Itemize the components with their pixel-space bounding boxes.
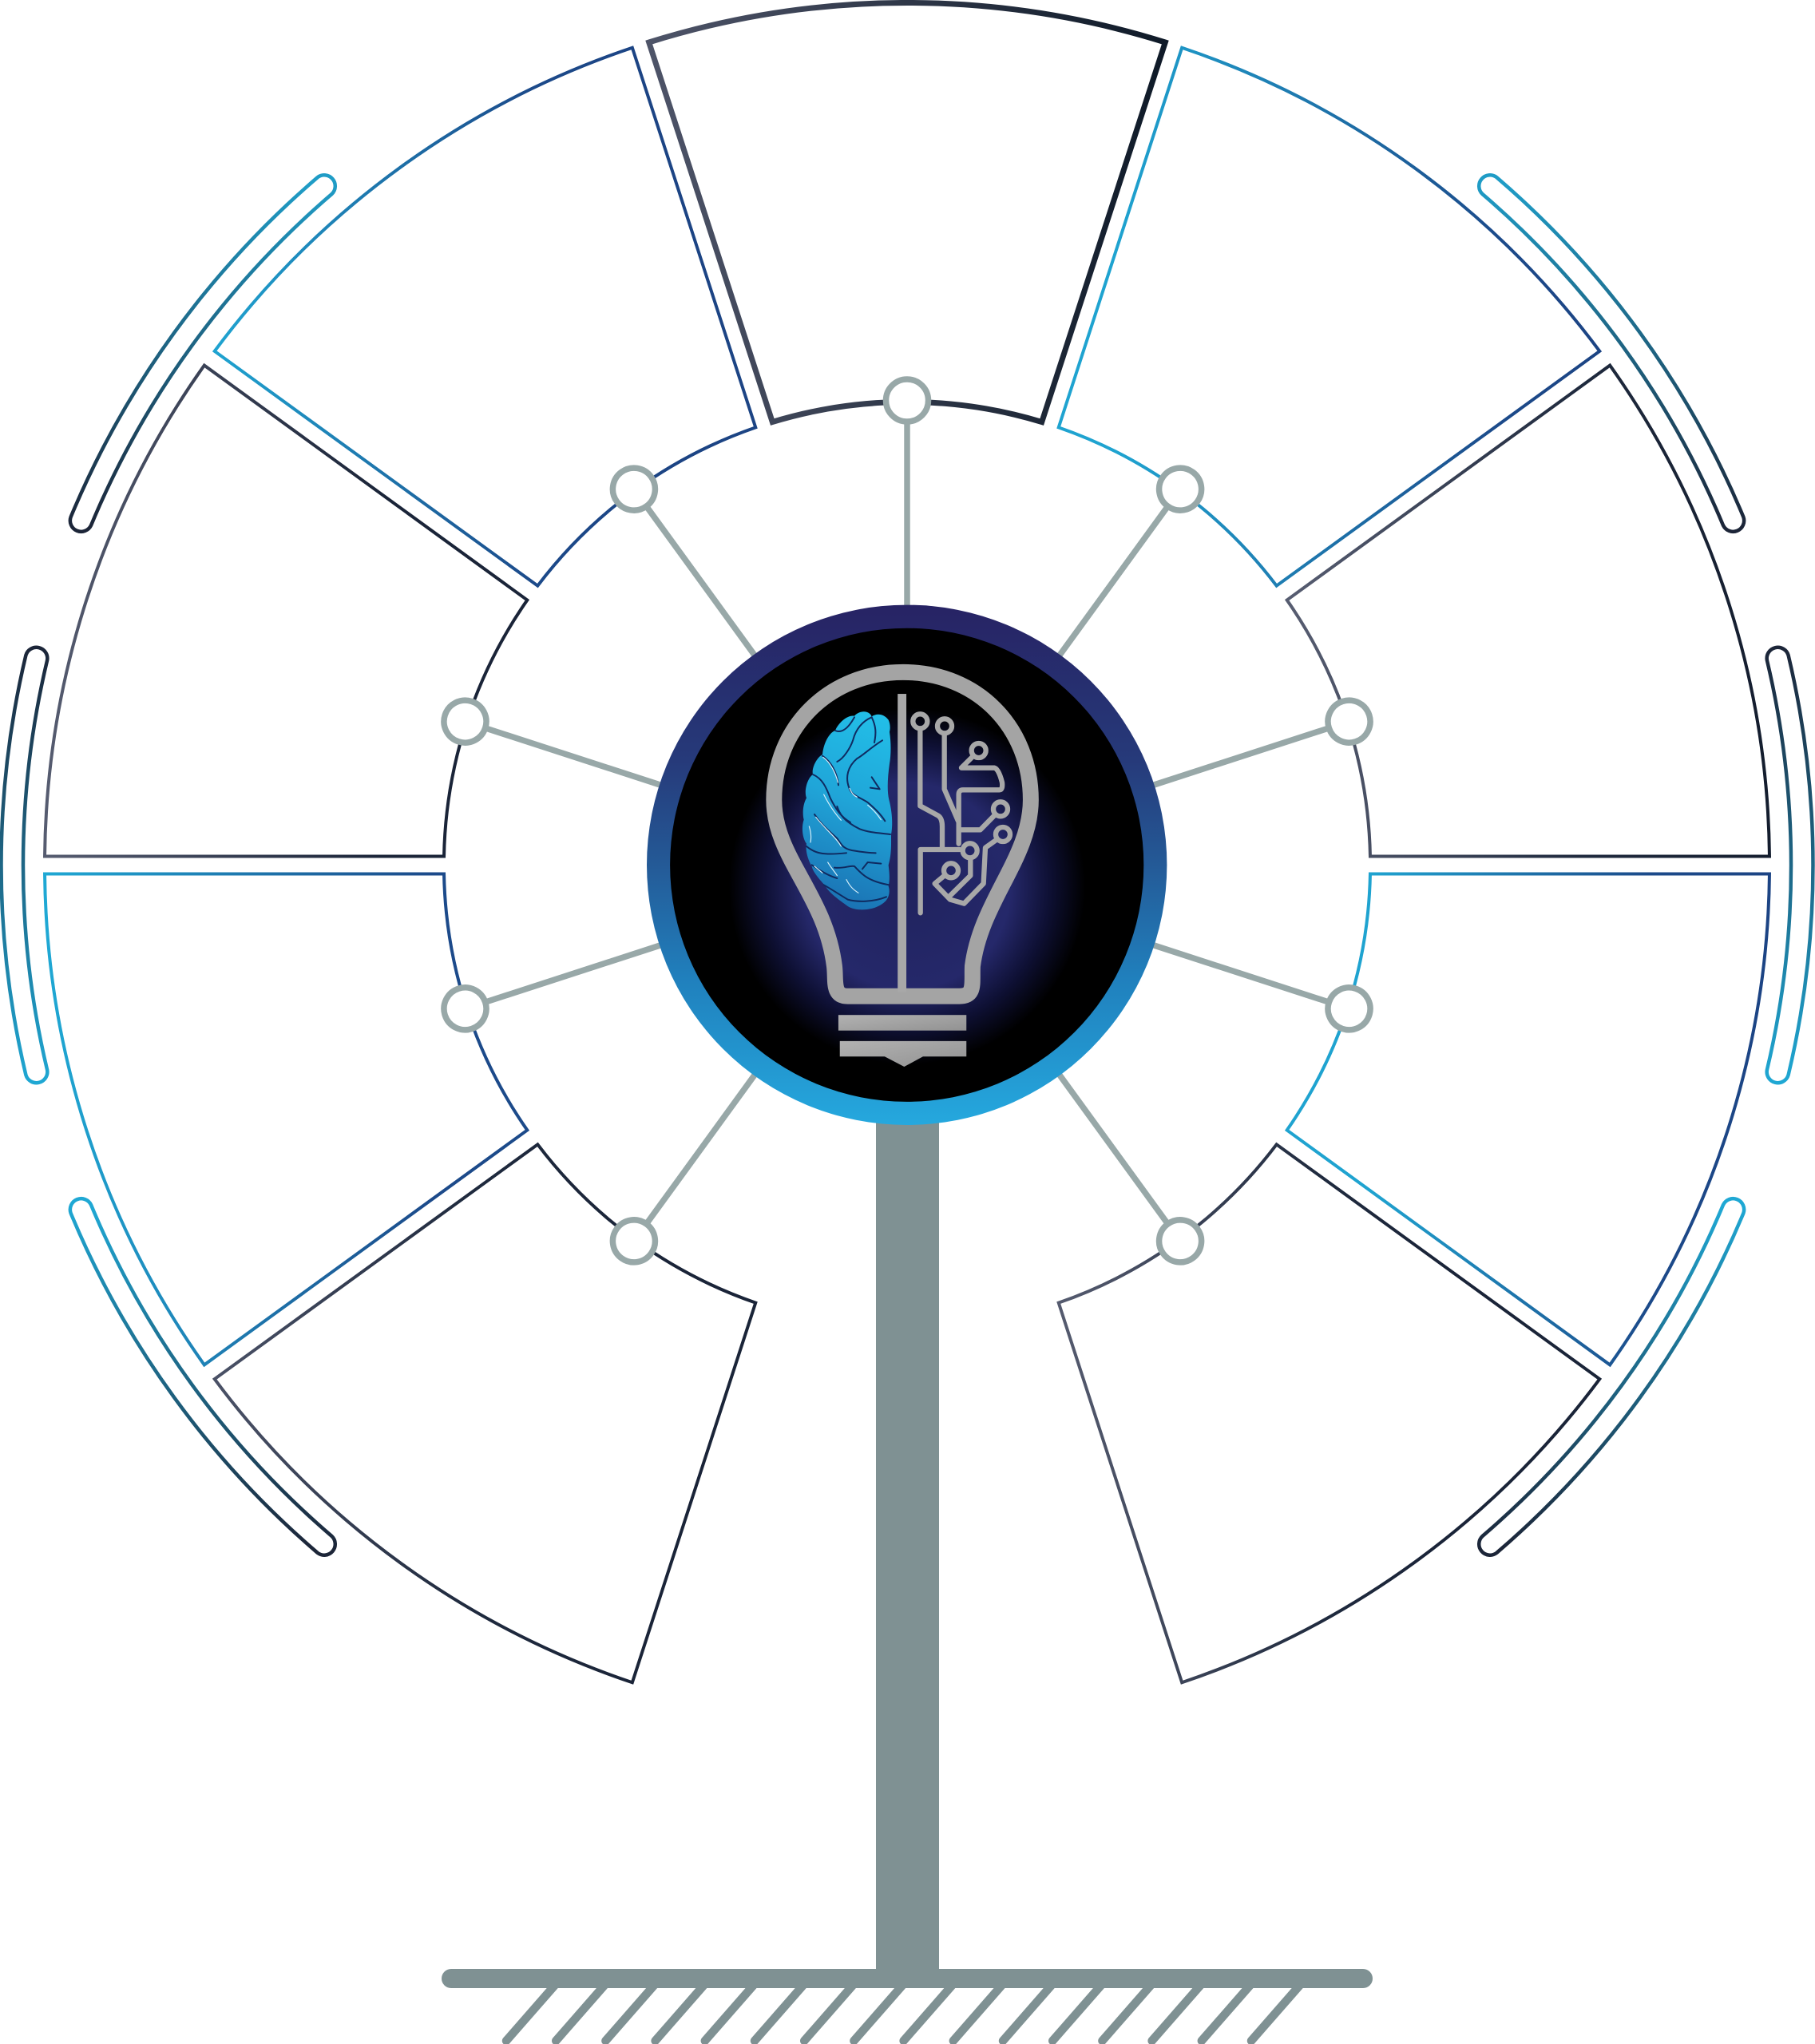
capsule: upper left: [46, 156, 339, 536]
panel: segment upper left: [192, 16, 855, 659]
icon: lightbulb outline and base: [774, 672, 1031, 1067]
badge dark disc: [670, 628, 1143, 1102]
spoke node -144: [604, 1056, 777, 1270]
spoke node -36: [604, 460, 777, 675]
badge inner glow: [719, 699, 1095, 1074]
base bar: [442, 1969, 1373, 1988]
capsule: upper right: [1475, 156, 1768, 536]
panel: segment right lower: [1249, 757, 1807, 1377]
capsule: lower left: [46, 1194, 339, 1574]
brain highlights: [809, 757, 881, 893]
icon: circuit traces: [913, 714, 1010, 913]
panel: segment right upper: [1249, 353, 1807, 973]
spoke node 36: [1037, 460, 1210, 675]
stem: [876, 1114, 939, 1976]
spoke node -108: [438, 922, 676, 1036]
spoke node 108: [1139, 922, 1376, 1036]
icon: brain: [802, 711, 892, 909]
capsule: left: [2, 648, 47, 1083]
spoke node 72: [1139, 695, 1376, 808]
spoke node top: [886, 379, 928, 615]
spokes with node circles: [438, 379, 1376, 1270]
central badge: [647, 605, 1167, 1125]
stand: stem, base and ground hatching: [442, 1114, 1373, 2041]
capsule: lower right: [1475, 1194, 1768, 1574]
panel: segment left lower: [7, 757, 565, 1377]
panel: segment lower right: [959, 1072, 1623, 1714]
capsule: right: [1767, 648, 1813, 1083]
panel: segment left upper: [7, 353, 565, 973]
ground hatching: [506, 1985, 1300, 2041]
brain folds: [806, 717, 890, 901]
panel: segment upper right: [959, 16, 1623, 659]
spoke node -72: [438, 695, 676, 808]
spoke node 144: [1037, 1056, 1210, 1270]
badge ring: [647, 605, 1167, 1125]
panel: segment top: [649, 2, 1165, 422]
panel: segment lower left: [192, 1072, 855, 1714]
